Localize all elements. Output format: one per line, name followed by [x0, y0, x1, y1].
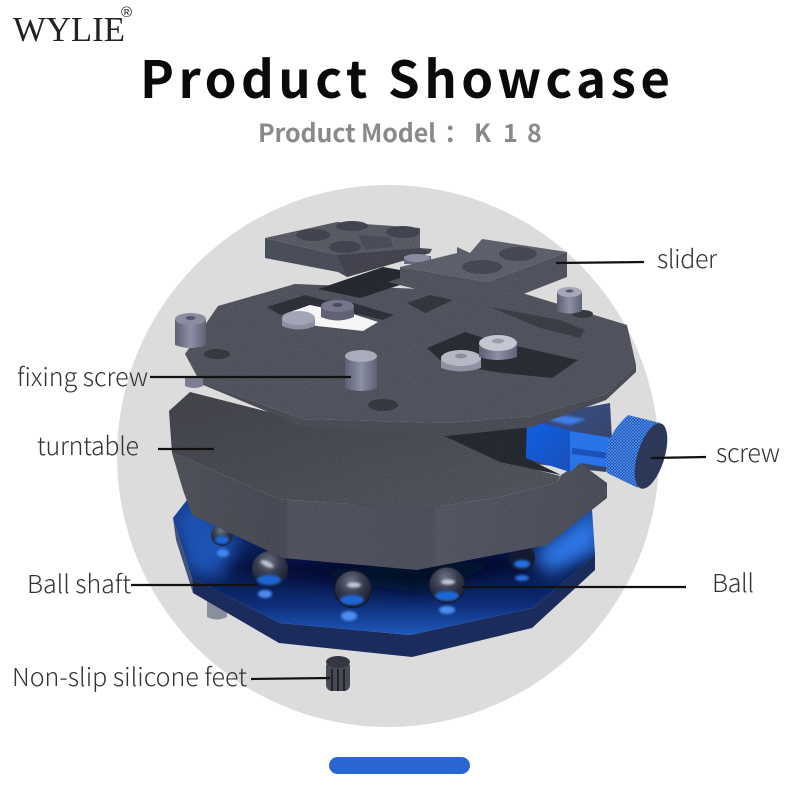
title: Product Showcase	[140, 39, 670, 113]
turntable	[169, 392, 607, 570]
slider: right block	[388, 239, 567, 307]
slot: right	[490, 307, 585, 338]
subtitle: product model: ：	[444, 114, 469, 150]
blue block and shaft	[526, 416, 625, 472]
ball: back right	[509, 545, 535, 571]
background circle	[117, 185, 659, 727]
callout: fixing screw: fixing screw	[17, 358, 148, 394]
silicone foot	[326, 656, 350, 691]
subtitle: product model: K	[474, 114, 492, 150]
callout: ball shaft: Ball shaft	[27, 565, 131, 601]
window: left	[267, 295, 394, 320]
window: right	[427, 332, 578, 378]
ball: left	[252, 551, 288, 587]
ball reflections	[217, 549, 529, 621]
fixing screws	[175, 287, 582, 391]
ball: right	[429, 567, 465, 603]
product illustration	[169, 221, 674, 691]
mounting holes	[204, 349, 230, 359]
callout: non-slip silicone feet: Non-slip silicone feet	[12, 658, 247, 694]
brand logo: WYLIE	[13, 10, 125, 49]
top plate	[185, 267, 636, 436]
window opening: white	[290, 305, 378, 331]
subtitle: product model: 8	[527, 114, 542, 150]
bottom accent pill	[329, 757, 470, 774]
subtitle: product model: 1	[503, 114, 518, 150]
callout: screw: screw	[716, 434, 780, 470]
callout: screw	[651, 434, 780, 470]
blue base	[172, 500, 600, 657]
small screw behind slider	[404, 254, 431, 264]
callout: turntable: turntable	[37, 427, 139, 463]
subtitle: product model: Product Model	[258, 114, 436, 150]
callout: slider: slider	[657, 240, 718, 276]
brand logo: ®	[121, 4, 132, 21]
callout: ball: Ball	[712, 564, 754, 600]
knurled knob	[606, 415, 674, 492]
window: centre lower	[407, 295, 453, 313]
ball: centre	[334, 570, 372, 608]
ball: back left	[211, 524, 233, 546]
window: centre upper	[318, 267, 400, 298]
slider: left block	[265, 221, 432, 277]
blue screw housing	[500, 403, 612, 472]
foot behind base	[207, 590, 227, 620]
